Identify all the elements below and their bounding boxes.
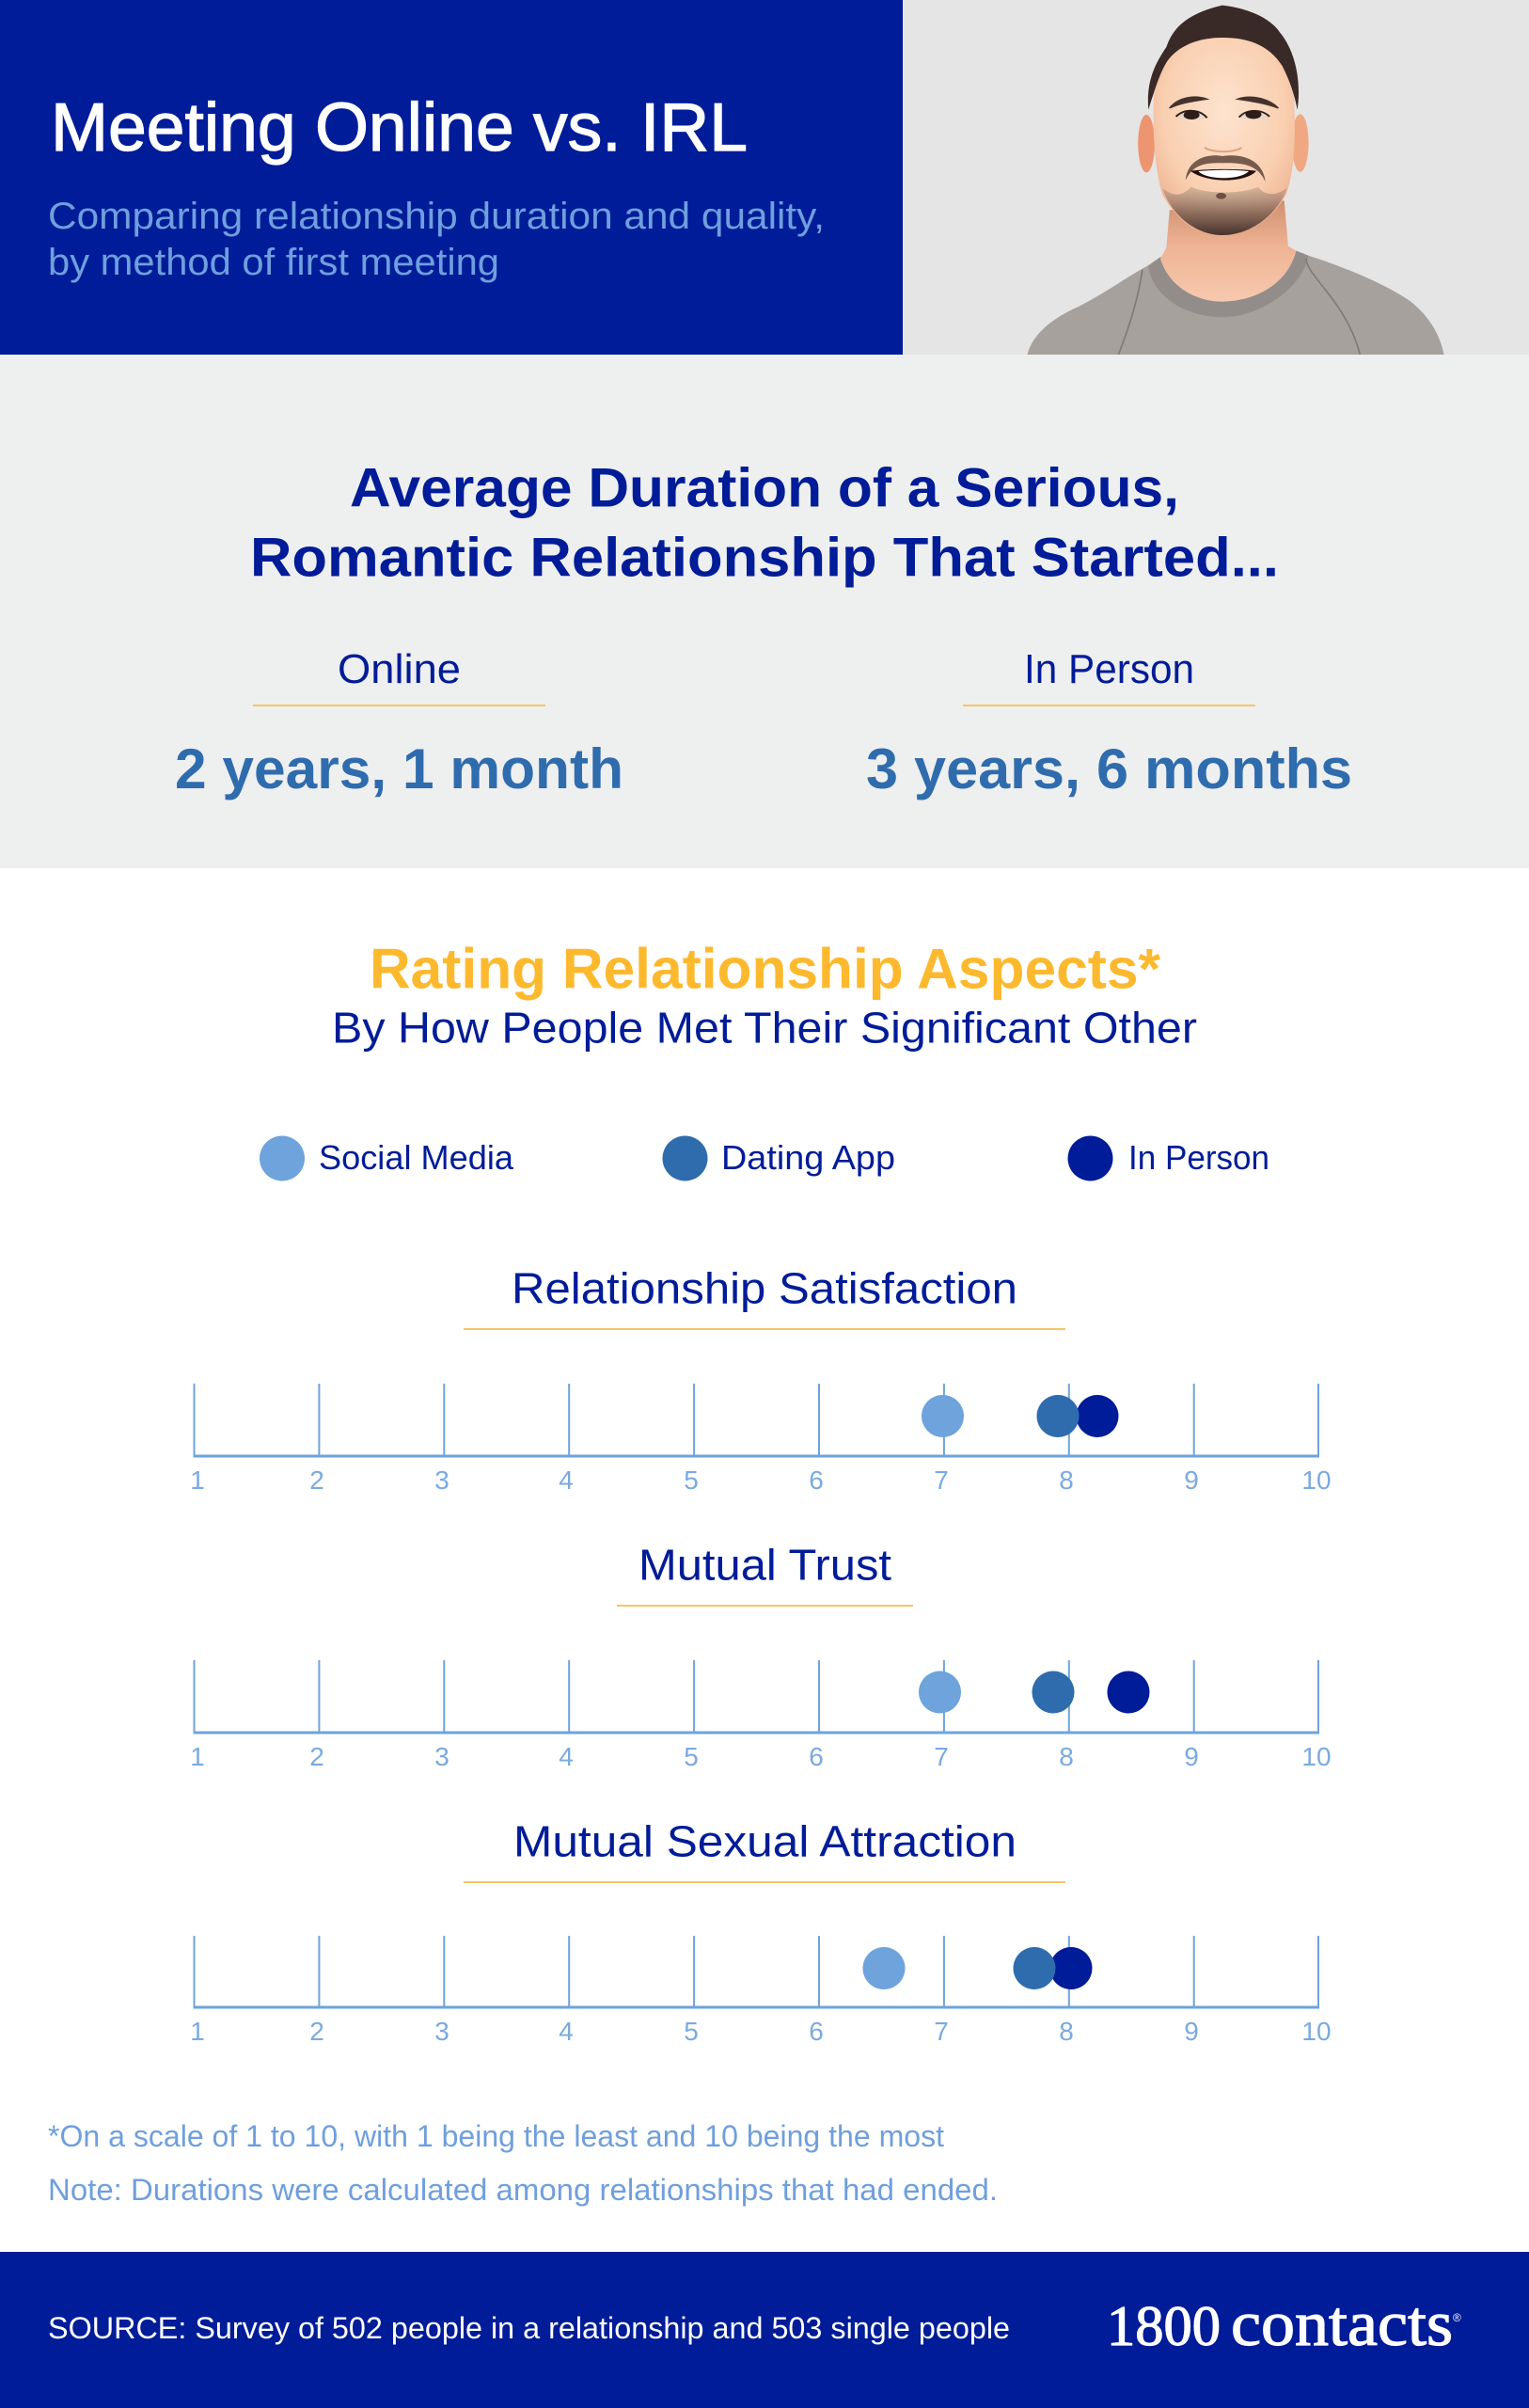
header blue background: [0, 0, 903, 355]
neck: [1160, 200, 1296, 302]
logo: 1800 contacts: contacts: [1231, 2288, 1453, 2359]
soul patch: [1216, 193, 1226, 199]
axis: 8: [1059, 1742, 1074, 1771]
chart title: Mutual Sexual Attraction: [513, 1817, 1017, 1866]
shirt seams: [1118, 259, 1360, 355]
data points: [863, 1947, 1093, 1989]
subtitle: [48, 196, 825, 283]
face: [1154, 37, 1295, 235]
axis: 9: [1184, 1465, 1199, 1495]
mustache: [1186, 155, 1266, 182]
axis: 10: [1301, 2017, 1332, 2046]
legend: Social Media: [319, 1138, 514, 1177]
data points: [922, 1395, 1119, 1437]
axis: 8: [1059, 2017, 1074, 2046]
axis: 5: [684, 1742, 699, 1771]
panel: photo: [903, 0, 1529, 355]
footnotes: *On a scale of 1 to 10, with 1 being the least and 10 being the most: [48, 2119, 944, 2153]
legend: Dating App: [721, 1138, 895, 1177]
column: online: 2 years, 1 month: [175, 737, 623, 800]
column: in person: 3 years, 6 months: [866, 737, 1352, 800]
chart title: Relationship Satisfaction: [512, 1264, 1017, 1313]
illustration: smiling man: [1028, 6, 1444, 355]
logo: 1800 contacts: [1107, 2288, 1461, 2359]
axis: 2: [309, 2017, 324, 2046]
axis: 7: [934, 1742, 949, 1771]
source text: SOURCE: Survey of 502 people in a relationship and 503 single people: [48, 2311, 1010, 2345]
axis: 3: [434, 2017, 449, 2046]
logo: 1800 contacts: ®: [1453, 2311, 1461, 2324]
column: in person: In Person: [1024, 646, 1194, 692]
footer background: [0, 2252, 1529, 2408]
legend: [260, 1136, 1269, 1181]
shirt: [1028, 251, 1444, 355]
legend: In Person: [1128, 1138, 1269, 1177]
column: online: [175, 646, 623, 800]
axis: 6: [809, 1742, 824, 1771]
axis: [190, 1384, 1332, 1495]
axis: 5: [684, 1465, 699, 1495]
axis: 3: [434, 1465, 449, 1495]
duration heading: Romantic Relationship That Started...: [250, 527, 1279, 589]
hair: [1148, 6, 1299, 110]
panel: average duration: [0, 355, 1529, 868]
axis: [190, 1936, 1332, 2046]
axis: [190, 1660, 1332, 1771]
axis: 6: [809, 1465, 824, 1495]
collar: [1148, 251, 1308, 317]
axis: 9: [1184, 1742, 1199, 1771]
chart title: Mutual Trust: [638, 1541, 891, 1590]
jaw beard: [1162, 187, 1287, 235]
axis: 7: [934, 2017, 949, 2046]
column: in person: [866, 646, 1352, 800]
section heading: rating relationship aspects: [332, 937, 1197, 1052]
subtitle: Comparing relationship duration and quality,: [48, 196, 825, 237]
axis: 4: [559, 1742, 574, 1771]
footnotes: Note: Durations were calculated among relationships that had ended.: [48, 2173, 998, 2207]
chart: relationship satisfaction: [190, 1264, 1332, 1495]
mouth: [1190, 169, 1256, 181]
axis: 2: [309, 1465, 324, 1495]
right ear: [1292, 114, 1309, 172]
axis: 1: [190, 1465, 205, 1495]
logo: 1800 contacts: 1800: [1107, 2295, 1221, 2357]
axis: 2: [309, 1742, 324, 1771]
title: Meeting Online vs. IRL: [51, 90, 748, 166]
panel: header: [0, 0, 903, 355]
chart: mutual trust: [190, 1541, 1332, 1771]
teeth: [1198, 170, 1249, 178]
axis: 7: [934, 1465, 949, 1495]
axis: 4: [559, 2017, 574, 2046]
axis: 4: [559, 1465, 574, 1495]
eyes: [1176, 110, 1269, 120]
axis: 9: [1184, 2017, 1199, 2046]
axis: 6: [809, 2017, 824, 2046]
axis: 10: [1301, 1465, 1332, 1495]
photo background: [903, 0, 1529, 355]
left ear: [1138, 115, 1155, 172]
brows: [1170, 97, 1278, 108]
panel: footer: [0, 2252, 1529, 2408]
column: online: Online: [338, 646, 461, 692]
section heading: rating relationship aspects: By How People Met Their Significant Other: [332, 1003, 1197, 1052]
duration heading: Average Duration of a Serious,: [350, 457, 1179, 519]
footnotes: [48, 2119, 998, 2207]
axis: 5: [684, 2017, 699, 2046]
axis: 1: [190, 2017, 205, 2046]
axis: 8: [1059, 1465, 1074, 1495]
nose: [1205, 148, 1241, 151]
duration heading: [250, 457, 1279, 589]
section heading: rating relationship aspects: Rating Relationship Aspects*: [370, 937, 1161, 1001]
data points: [919, 1671, 1149, 1714]
gray background: [0, 355, 1529, 868]
axis: 10: [1301, 1742, 1332, 1771]
chart: mutual sexual attraction: [190, 1817, 1332, 2046]
subtitle: by method of first meeting: [48, 242, 499, 283]
axis: 3: [434, 1742, 449, 1771]
axis: 1: [190, 1742, 205, 1771]
